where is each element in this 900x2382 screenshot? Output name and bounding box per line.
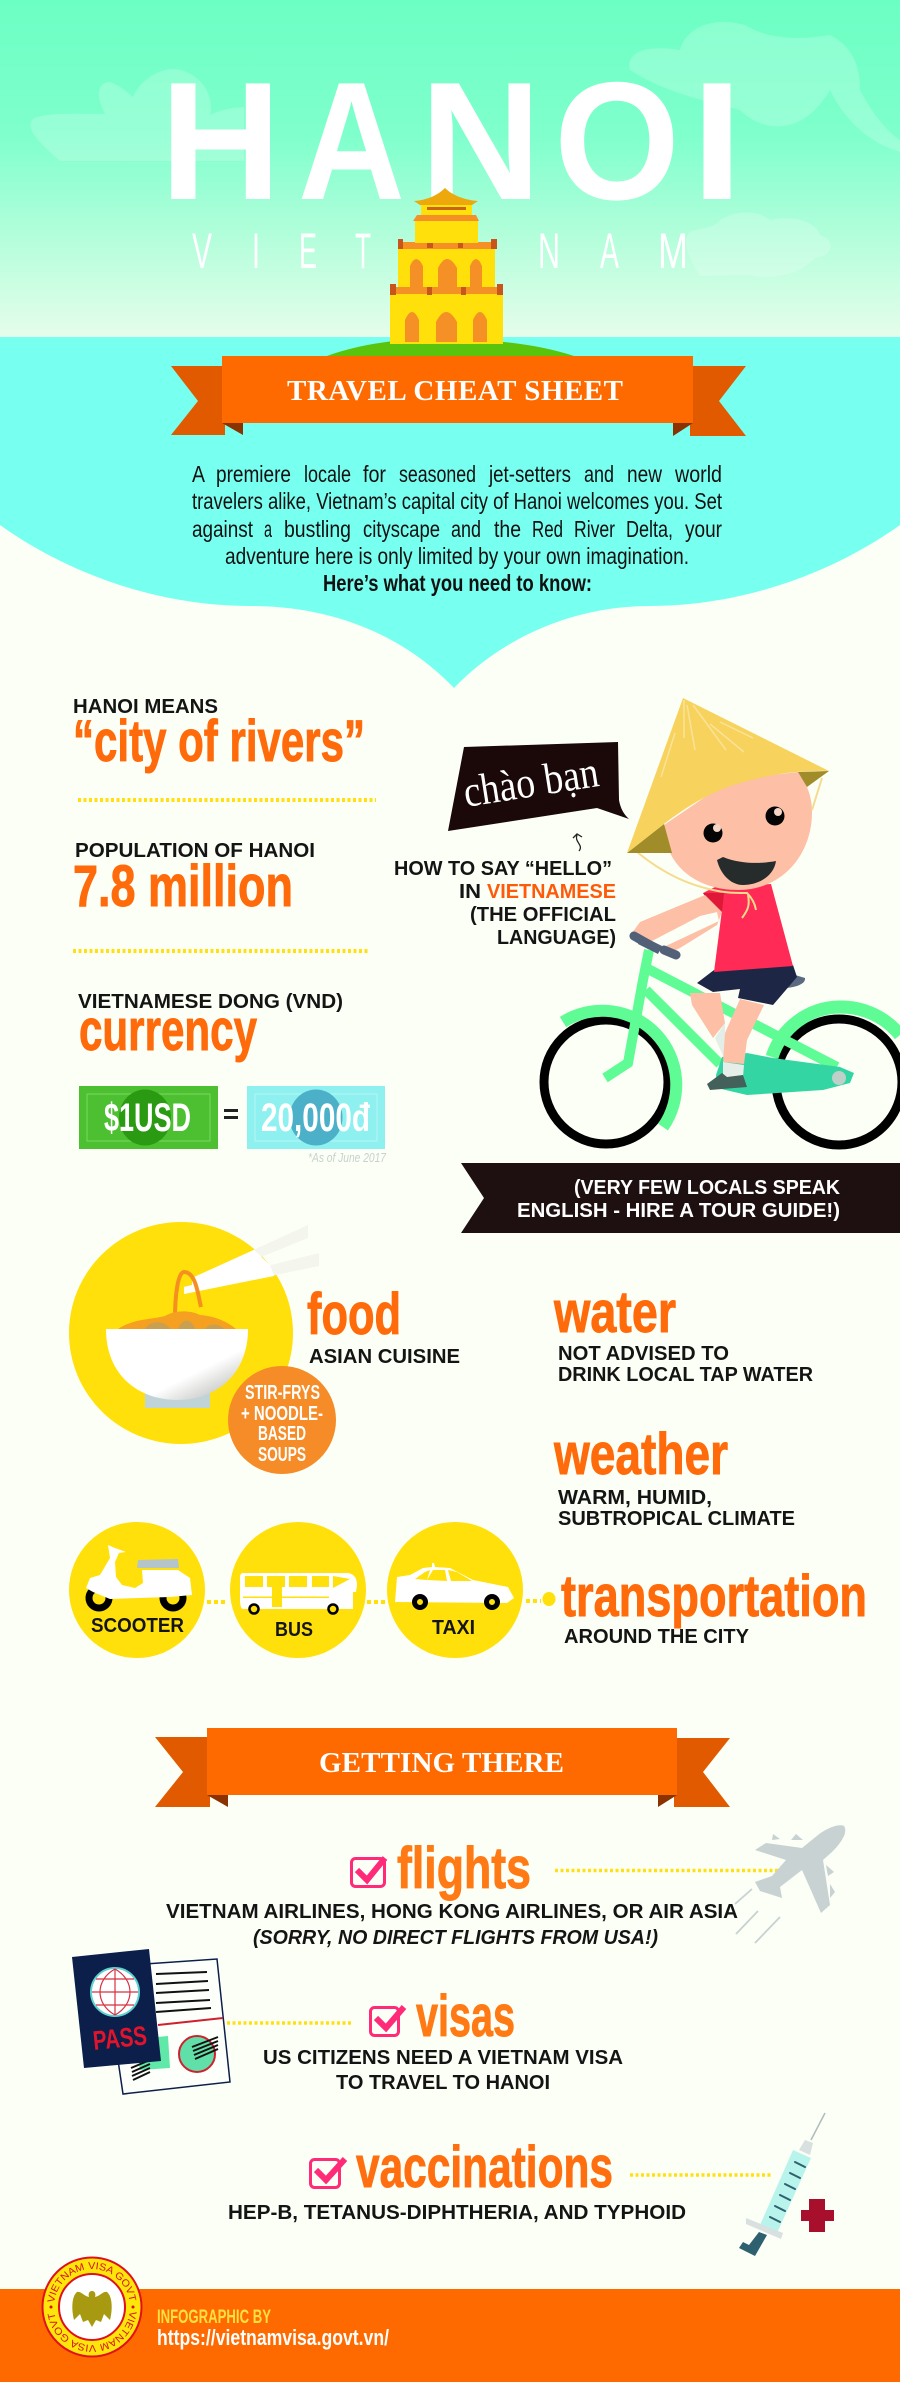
subtitle: VIETNAM: V	[192, 223, 212, 279]
icon: medical cross	[801, 2199, 834, 2232]
fact: water: NOT ADVISED TO	[558, 1343, 729, 1365]
logo: vietnam visa badge: VIETNAM VISA GOVT	[48, 2312, 137, 2352]
text block: introduction: your	[685, 516, 722, 542]
text block: introduction: travelers alike, Vietnam’s capital city of Hanoi welcomes you. Set	[192, 488, 722, 514]
text block: introduction: Delta,	[626, 516, 673, 542]
hat strap	[637, 778, 822, 918]
fact: transportation: AROUND THE CITY	[564, 1626, 750, 1648]
icon: passport and visa paper	[72, 1949, 230, 2094]
fact: population: 7.8 million	[73, 854, 293, 919]
mouth	[717, 857, 776, 885]
icon: pagoda tower on island	[327, 188, 574, 356]
credit text	[157, 2307, 389, 2350]
text block: introduction: and	[451, 516, 481, 542]
text block: introduction: bustling	[284, 516, 351, 542]
fact: water: DRINK LOCAL TAP WATER	[558, 1364, 814, 1386]
logo: vietnam visa badge	[42, 2256, 142, 2358]
icon: dollar bill: $1USD	[104, 1096, 191, 1140]
text block: introduction: River	[574, 516, 615, 542]
text block: introduction: and	[584, 461, 614, 487]
connector dots	[207, 1600, 227, 1604]
fact: weather: SUBTROPICAL CLIMATE	[558, 1508, 795, 1530]
section: visas: visas	[416, 1984, 515, 2049]
section: vaccinations	[228, 2135, 772, 2224]
icon: scooter	[69, 1522, 205, 1658]
seat	[783, 975, 805, 988]
subtitle: VIETNAM	[192, 223, 688, 279]
text block: introduction: seasoned	[399, 461, 476, 487]
callout: dishes: BASED	[258, 1423, 306, 1445]
banner: tour guide note: (VERY FEW LOCALS SPEAK	[574, 1177, 841, 1199]
section: vaccinations: HEP-B, TETANUS-DIPHTHERIA, AND TYPHOID	[228, 2202, 686, 2224]
section: vaccinations: vaccinations	[356, 2135, 613, 2200]
text block: introduction: Red	[532, 516, 563, 542]
back leg	[690, 993, 725, 1038]
icon: checkbox	[370, 2007, 404, 2036]
globe	[91, 1968, 139, 2016]
fact: food	[307, 1282, 460, 1368]
text block: introduction: a	[264, 516, 272, 542]
icon: checkbox	[310, 2159, 345, 2188]
shirt	[703, 884, 793, 972]
fact: weather	[553, 1422, 795, 1530]
text block: introduction: A	[192, 461, 206, 487]
fact: weather: weather	[553, 1422, 728, 1487]
subtitle: VIETNAM: A	[600, 223, 619, 279]
icon: small arrow	[573, 834, 582, 851]
title: HANOI: O	[554, 47, 680, 235]
panel: sea with intro	[0, 337, 900, 688]
logo: vietnam visa badge: VIETNAM VISA GOVT	[47, 2262, 136, 2302]
shorts	[697, 965, 797, 1005]
icon: bus: BUS	[275, 1619, 313, 1641]
fact: hanoi means: HANOI MEANS	[73, 696, 218, 718]
text block: introduction: for	[363, 461, 386, 487]
text block: how to say hello: IN	[459, 881, 481, 903]
conical hat	[627, 698, 829, 853]
eagle emblem	[72, 2291, 112, 2327]
panel: sky header	[0, 0, 900, 338]
icon: scooter: SCOOTER	[91, 1615, 185, 1637]
front leg	[723, 999, 764, 1064]
title: HANOI: N	[420, 47, 541, 235]
fact: currency	[78, 991, 387, 1165]
section: flights: (SORRY, NO DIRECT FLIGHTS FROM USA!)	[253, 1927, 658, 1949]
subtitle: VIETNAM: T	[355, 223, 371, 279]
icon: checkbox	[352, 1858, 385, 1886]
banner: getting there	[155, 1728, 730, 1807]
icon: bicycle	[544, 950, 900, 1145]
banner text: GETTING THERE	[319, 1747, 564, 1779]
icon: dollar bill	[79, 1086, 218, 1149]
connector dots to transportation	[526, 1592, 556, 1606]
banner: tour guide note	[461, 1163, 900, 1233]
icon: bus	[230, 1522, 366, 1658]
footnote: *As of June 2017	[308, 1150, 387, 1165]
section: flights	[166, 1825, 845, 1949]
section: flights: VIETNAM AIRLINES, HONG KONG AIRLINES, OR AIR ASIA	[166, 1901, 738, 1923]
icon: taxi	[387, 1522, 523, 1658]
text block: how to say hello: LANGUAGE)	[497, 927, 616, 949]
text block: introduction: locale	[304, 461, 351, 487]
subtitle: VIETNAM: M	[658, 223, 688, 279]
credit text: INFOGRAPHIC BY	[157, 2307, 271, 2328]
head	[664, 772, 812, 890]
title: HANOI: I	[691, 47, 743, 235]
arm	[632, 895, 722, 955]
credit text: https://vietnamvisa.govt.vn/	[157, 2325, 389, 2350]
fact: water	[553, 1280, 814, 1386]
text block: introduction	[192, 461, 722, 596]
fact: weather: WARM, HUMID,	[558, 1487, 712, 1509]
section: visas	[227, 1984, 623, 2094]
text block: introduction: the	[494, 516, 521, 542]
banner: travel cheat sheet	[171, 356, 746, 436]
section: visas: US CITIZENS NEED A VIETNAM VISA	[263, 2047, 623, 2069]
text block: introduction: world	[674, 461, 722, 487]
icon: dong bill: 20,000đ	[261, 1096, 370, 1140]
text block: how to say hello	[394, 858, 616, 949]
fact: food: food	[307, 1282, 401, 1347]
fact: hanoi means: “city of rivers”	[73, 709, 365, 774]
text block: introduction: cityscape	[363, 516, 440, 542]
callout: dishes	[228, 1366, 336, 1474]
text block: introduction: adventure here is only limited by your own imagination.	[225, 543, 689, 569]
fact: water: water	[553, 1280, 676, 1345]
section: visas: TO TRAVEL TO HANOI	[336, 2072, 550, 2094]
icon: passport and visa paper: PASS	[91, 2020, 148, 2056]
text block: introduction: Here’s what you need to know:	[323, 570, 592, 596]
callout: dishes: + NOODLE-	[241, 1403, 323, 1425]
fact: population: POPULATION OF HANOI	[75, 840, 315, 862]
text block: introduction: jet-setters	[488, 461, 571, 487]
section: flights: flights	[397, 1836, 531, 1901]
speech bubble: chao ban: chào bạn	[460, 747, 602, 817]
text block: how to say hello: HOW TO SAY “HELLO”	[394, 858, 612, 880]
title: HANOI: H	[160, 47, 281, 235]
banner: tour guide note: ENGLISH - HIRE A TOUR GUIDE!)	[517, 1200, 840, 1222]
callout: dishes: STIR-FRYS	[245, 1382, 320, 1404]
banner text: TRAVEL CHEAT SHEET	[287, 375, 623, 407]
chain guard	[716, 1053, 854, 1095]
fact: hanoi means	[73, 696, 365, 774]
text block: how to say hello: (THE OFFICIAL	[470, 904, 616, 926]
icon: airplane	[735, 1825, 845, 1943]
text block: introduction: against	[192, 516, 253, 542]
fact: currency: VIETNAMESE DONG (VND)	[78, 991, 343, 1013]
text block: introduction: premiere	[216, 461, 291, 487]
eyes	[704, 806, 784, 842]
icon: dong bill	[247, 1086, 385, 1149]
fact: food: ASIAN CUISINE	[309, 1346, 460, 1368]
text block: introduction: new	[627, 461, 662, 487]
connector dots	[367, 1600, 386, 1604]
subtitle: VIETNAM: E	[299, 223, 317, 279]
footer bar	[0, 2289, 900, 2382]
subtitle: VIETNAM: I	[252, 223, 260, 279]
title: HANOI: A	[298, 47, 405, 235]
handlebar grip	[634, 936, 676, 955]
icon: noodle bowl	[69, 1222, 319, 1444]
equals sign	[224, 1109, 238, 1119]
text block: how to say hello: VIETNAMESE	[487, 881, 616, 903]
callout: dishes: SOUPS	[258, 1444, 306, 1466]
icon: taxi: TAXI	[432, 1617, 475, 1639]
title: HANOI	[160, 47, 743, 235]
subtitle: VIETNAM: N	[538, 223, 560, 279]
fact: currency: currency	[79, 998, 257, 1063]
illustration: child riding bicycle	[544, 698, 900, 1145]
icon: syringe	[739, 2113, 825, 2256]
